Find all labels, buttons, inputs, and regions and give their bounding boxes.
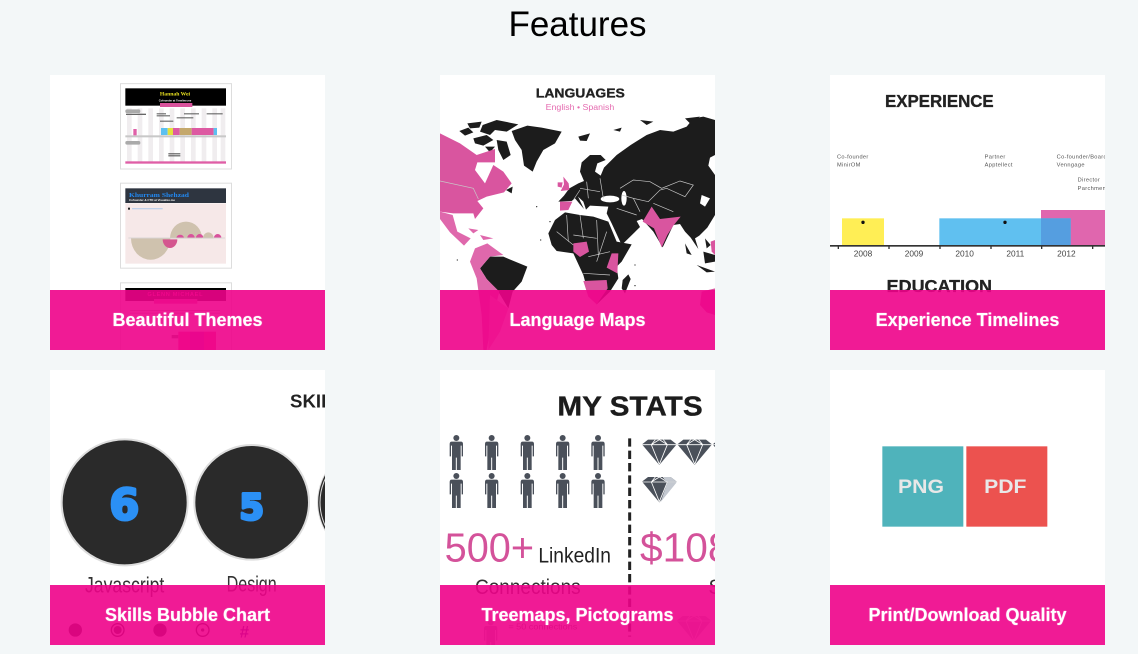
country borders [440, 178, 693, 275]
pictogram keys [484, 616, 711, 654]
label bar: Beautiful Themes [112, 310, 263, 330]
dashed divider [625, 438, 634, 637]
stat: LinkedIn connections [445, 525, 611, 599]
bubble: Design: 5 [239, 488, 264, 529]
pictogram keys: = 50 connections [508, 621, 578, 631]
inland seas [601, 191, 710, 207]
timeline job labels: Venngage [1057, 163, 1085, 169]
timeline axis: 2011 [1006, 249, 1025, 259]
timeline job labels [837, 154, 1108, 192]
label bar: Skills Bubble Chart [105, 605, 270, 625]
thumbnail: Khurram Shehzad theme: Cofounder & CTO at Visualize.me [129, 198, 175, 202]
stats pictograms [445, 390, 715, 636]
panel: language maps [440, 75, 715, 350]
timeline job labels: Apptellect [985, 163, 1013, 169]
label bar [830, 585, 1105, 645]
stat: LinkedIn connections: LinkedIn [538, 543, 611, 567]
bubble: Design [194, 445, 309, 597]
thumbnail: Khurram Shehzad theme: Khurram Shehzad [129, 193, 190, 199]
timeline bars [842, 210, 1105, 245]
panel: print/download quality [830, 370, 1105, 645]
label bar: Language Maps [509, 310, 646, 330]
section heading: education: EDUCATION [887, 276, 992, 296]
bubble: third skill [318, 445, 432, 560]
skill icons row: # [240, 622, 249, 641]
panel: skills bubble chart [50, 370, 325, 645]
timeline axis: 2012 [1057, 249, 1076, 259]
badge: PDF [966, 446, 1047, 527]
timeline job labels: MinirOM [837, 163, 861, 169]
timeline axis: 2009 [905, 249, 924, 259]
badge: PNG [882, 446, 963, 527]
thumbnail: Hannah Wei theme: Cofounder at Timeline.me [159, 98, 192, 102]
panel: treemaps, pictograms [440, 370, 715, 645]
badge: PNG: PNG [898, 477, 944, 498]
timeline job labels: Co-founder [837, 154, 869, 160]
map legend: English • Spanish [546, 103, 614, 112]
section heading: experience: EXPERIENCE [885, 91, 994, 111]
timeline axis: 2010 [955, 249, 974, 259]
Greenland and arctic islands drawn as one silhouette group [512, 126, 562, 172]
stat: LinkedIn connections: 500+ [445, 525, 534, 571]
panel: beautiful themes [50, 75, 325, 350]
stats heading: MY STATS [557, 390, 703, 421]
world map [440, 117, 715, 350]
label bar [50, 585, 325, 645]
label bar [440, 585, 715, 645]
thumbnail: Hannah Wei theme [120, 84, 232, 169]
diamond pictogram [642, 440, 747, 502]
label bar: Experience Timelines [876, 310, 1059, 330]
thumbnail: Glenn Michael theme [120, 283, 232, 353]
timeline job labels: Partner [985, 154, 1006, 160]
thumbnail: Khurram Shehzad theme [120, 183, 232, 268]
skill icons row [69, 622, 249, 641]
bubble: Design: Design [227, 572, 277, 597]
thumbnail: Glenn Michael theme: GLENN MICHAEL [147, 292, 203, 298]
label bar: Print/Download Quality [868, 605, 1066, 625]
stat: dollars [640, 525, 730, 599]
title: Features [508, 5, 647, 44]
theme thumbnails [120, 83, 232, 350]
people pictogram [450, 435, 605, 508]
thumbnail: Hannah Wei theme: Hannah Wei [160, 92, 191, 98]
languages world map [440, 86, 715, 350]
timeline axis: 2008 [854, 249, 873, 259]
timeline axis [830, 245, 1105, 259]
label bar: Treemaps, Pictograms [481, 605, 674, 625]
skills bubbles [60, 390, 325, 641]
bubble: Javascript: 6 [109, 481, 139, 531]
stat: LinkedIn connections: Connections [475, 575, 581, 599]
format badges [882, 446, 1048, 527]
experience timeline [830, 91, 1105, 296]
bubble: Javascript [62, 439, 188, 598]
map heading: LANGUAGES [536, 86, 625, 101]
badge: PDF: PDF [984, 477, 1027, 498]
label bar [440, 290, 715, 350]
label bar [50, 290, 325, 350]
panel: experience timelines [830, 75, 1105, 350]
bubble: Javascript: Javascript [85, 573, 164, 598]
timeline job labels: Director [1078, 178, 1100, 184]
label bar [830, 290, 1105, 350]
